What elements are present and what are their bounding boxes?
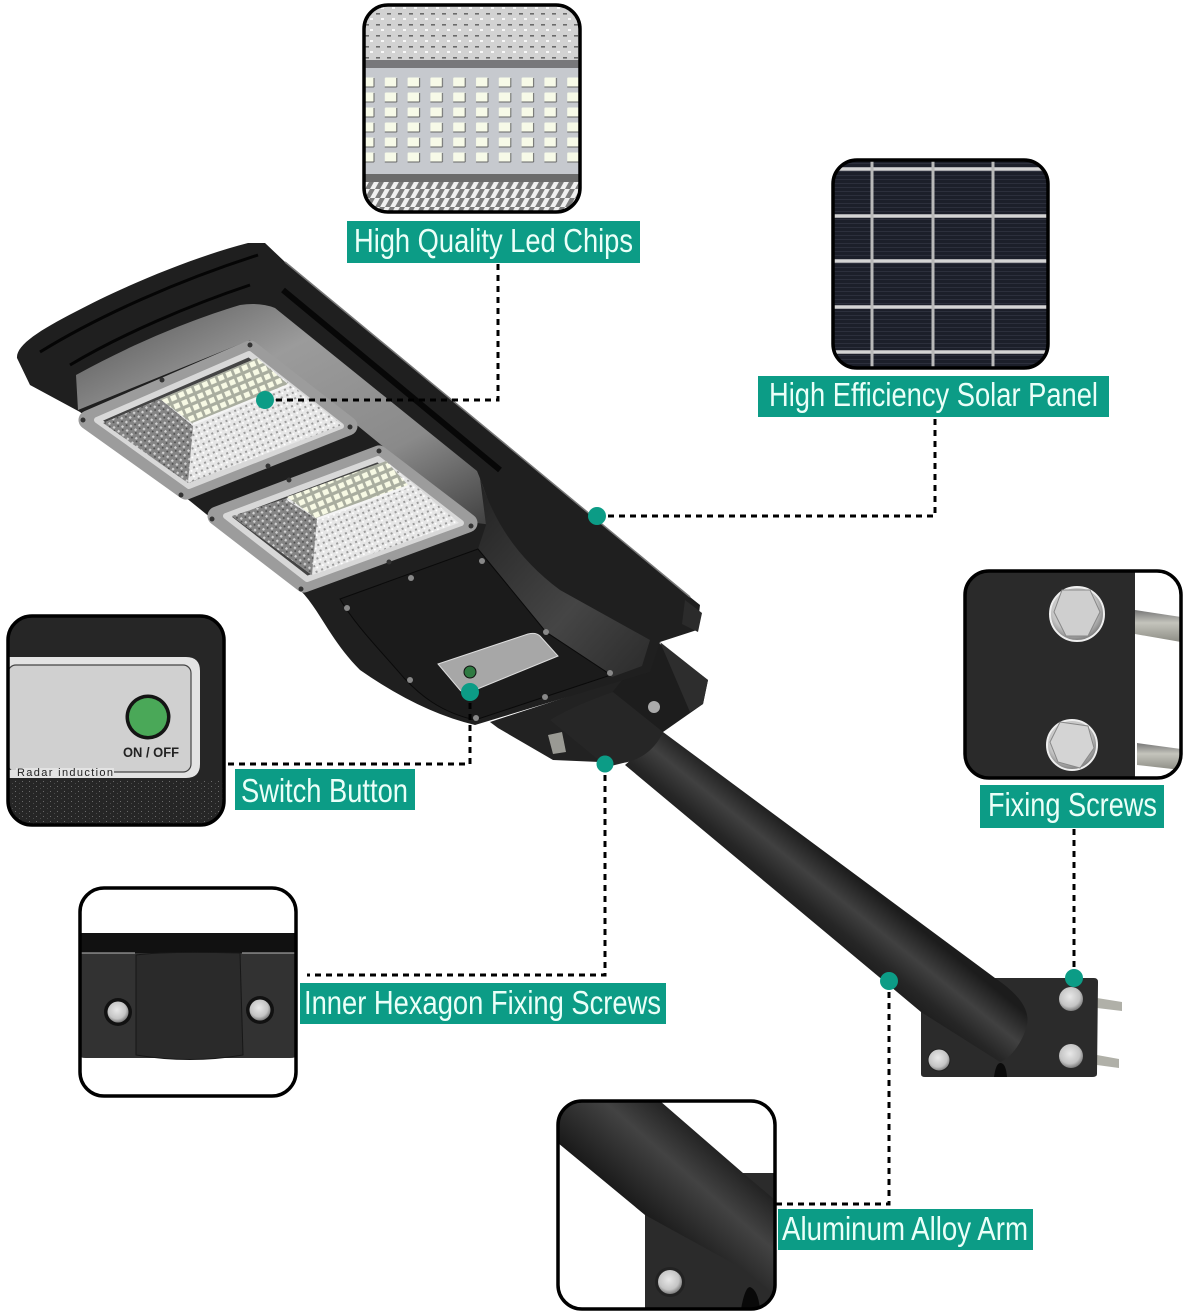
label: aluminum alloy arm: Aluminum Alloy Arm (782, 1210, 1028, 1247)
label: switch button: Switch Button (241, 772, 408, 809)
inset: solar panel (833, 160, 1048, 368)
inset: inner hexagon screws (80, 888, 296, 1096)
label: high efficiency solar panel: High Efficiency Solar Panel (769, 376, 1098, 413)
label: high quality led chips: High Quality Led Chips (354, 222, 633, 259)
lens module 2 (210, 448, 474, 592)
inset: switch button: Radar induction (17, 767, 113, 779)
inset: switch button (8, 616, 224, 825)
wall bracket plate with bolts (921, 978, 1122, 1077)
battery cover (340, 549, 613, 721)
lens module 1 (80, 342, 352, 498)
lamp housing (17, 243, 700, 725)
label: inner hexagon fixing screws: Inner Hexagon Fixing Screws (304, 984, 661, 1021)
connector lines (226, 263, 1074, 1204)
marker dots (256, 391, 1083, 990)
label plate with switch (438, 633, 558, 693)
housing end tab (682, 600, 702, 632)
lower mounting clamp (490, 640, 708, 767)
inset: switch button: ON / OFF (123, 744, 179, 760)
street light product photo (17, 243, 1122, 1077)
inset: led chips (364, 5, 580, 212)
top panel edge highlights (40, 255, 690, 597)
lower body shading (478, 478, 650, 677)
mounting arm (625, 732, 1028, 1062)
inset: aluminum arm (558, 1101, 775, 1309)
reflector recess (76, 304, 500, 526)
inset: fixing screws (965, 571, 1181, 778)
